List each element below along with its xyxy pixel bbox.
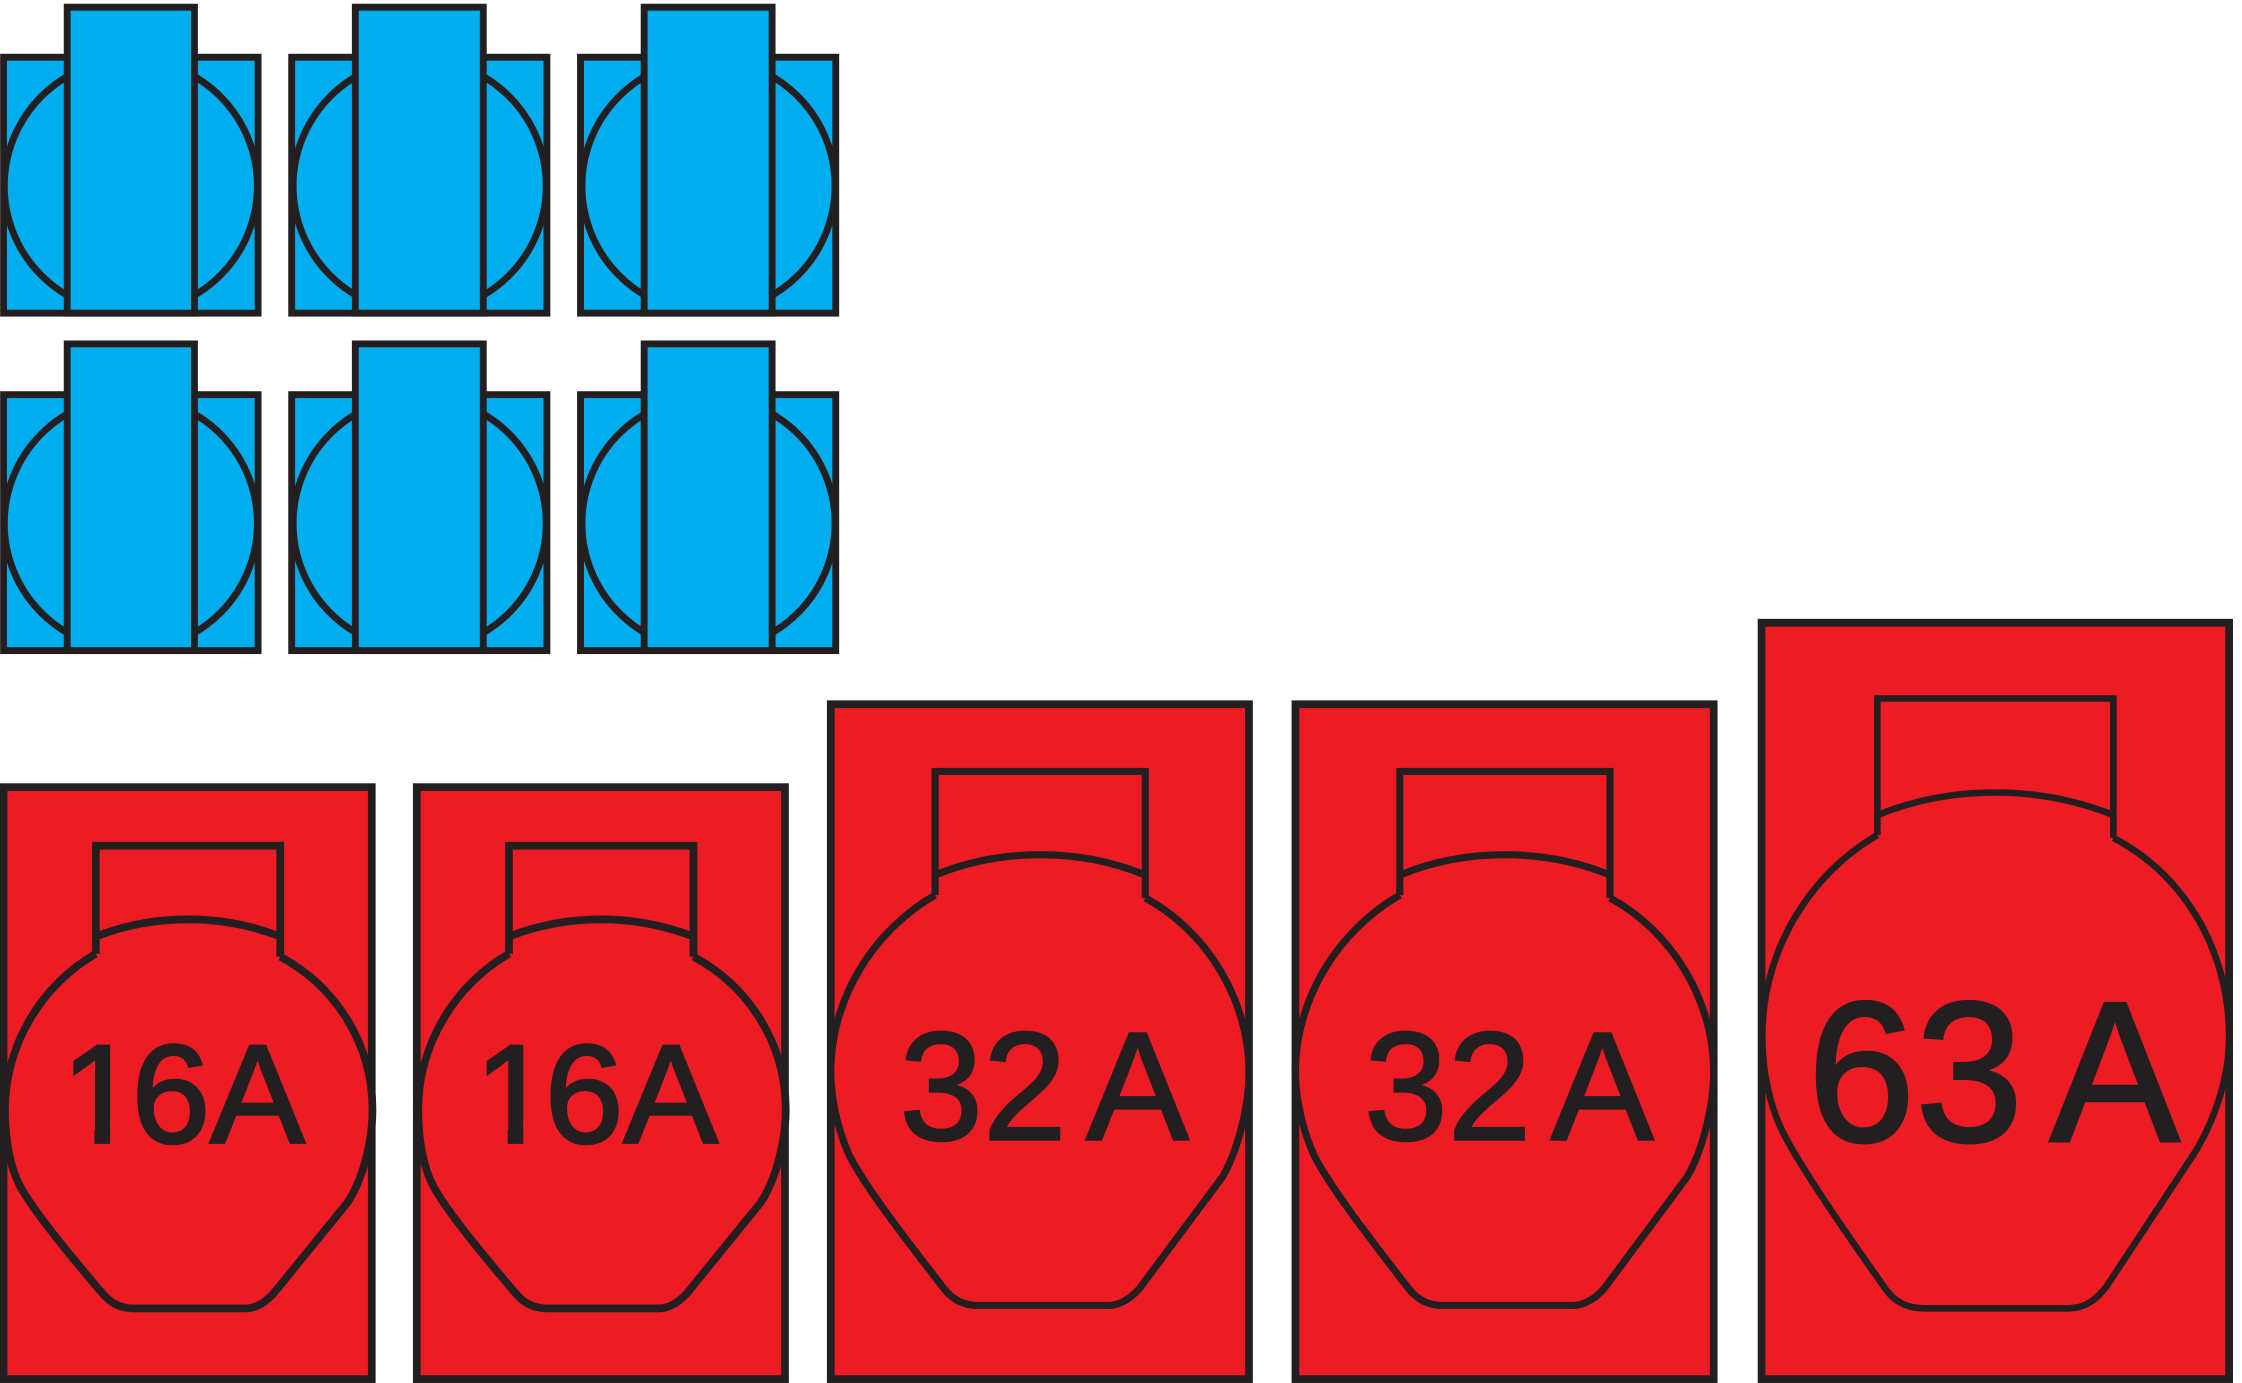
icon: blue socket row 2 column 1 [4,344,258,651]
icon: red socket 32 A, second [1295,704,1714,1379]
icon: red socket 16 A, second [417,787,786,1379]
icon: blue socket row 2 column 2 [292,344,547,651]
icon: red socket 16 A, first [4,787,372,1379]
icon: red socket 63 A [1762,623,2229,1379]
icon: blue socket row 1 column 3 [581,7,836,313]
icon: blue socket row 1 column 1 [4,7,258,313]
icon: red socket 16 A, first: 6A [132,1015,305,1172]
icon: red socket 16 A, first: 1 [61,1015,139,1172]
icon: red socket 16 A, second: 6A [545,1015,718,1172]
icon: red socket 63 A: A [2050,961,2180,1184]
icon: red socket 32 A, first: 32 [899,1000,1067,1173]
icon: red socket 63 A: 63 [1807,961,2023,1184]
icon: red socket 32 A, second: A [1551,1000,1654,1173]
icon: blue socket row 1 column 2 [292,7,547,313]
icon: red socket 32 A, first: A [1086,1000,1189,1173]
icon: red socket 32 A, first [831,704,1249,1379]
icon: red socket 32 A, second: 32 [1364,1000,1531,1173]
icon: red socket 16 A, second: 1 [475,1015,552,1172]
icon: blue socket row 2 column 3 [581,344,836,651]
